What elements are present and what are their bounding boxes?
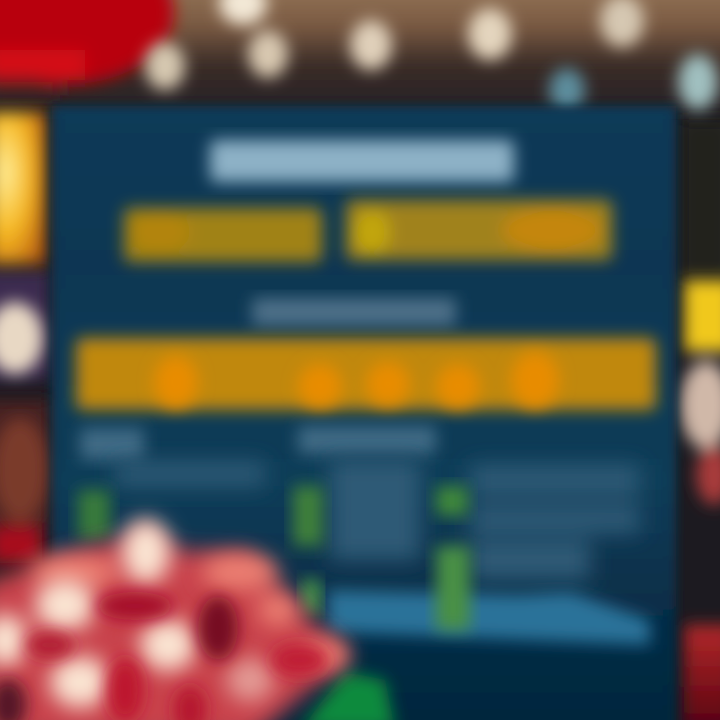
red chips top left [0, 0, 174, 96]
ceiling lights [145, 0, 718, 112]
heading: pale title bar [210, 140, 514, 182]
text block: column text lines [115, 460, 640, 580]
icon: green marker column one [78, 490, 110, 540]
callout: light blue band [328, 590, 650, 645]
text block: subheading [252, 298, 456, 326]
column headings [80, 426, 436, 460]
panel: main board [52, 106, 676, 720]
right side signs [680, 280, 720, 720]
left side glow [0, 112, 48, 563]
poker chips pile [0, 520, 350, 720]
icon: green marker column two [293, 486, 323, 546]
banner: orange band [76, 338, 656, 410]
green table corner [300, 672, 395, 720]
heading: yellow headline [124, 200, 612, 262]
icon: small green marker [302, 580, 320, 614]
icon: green marker column three [436, 486, 468, 516]
icon: tall green marker [436, 546, 470, 630]
